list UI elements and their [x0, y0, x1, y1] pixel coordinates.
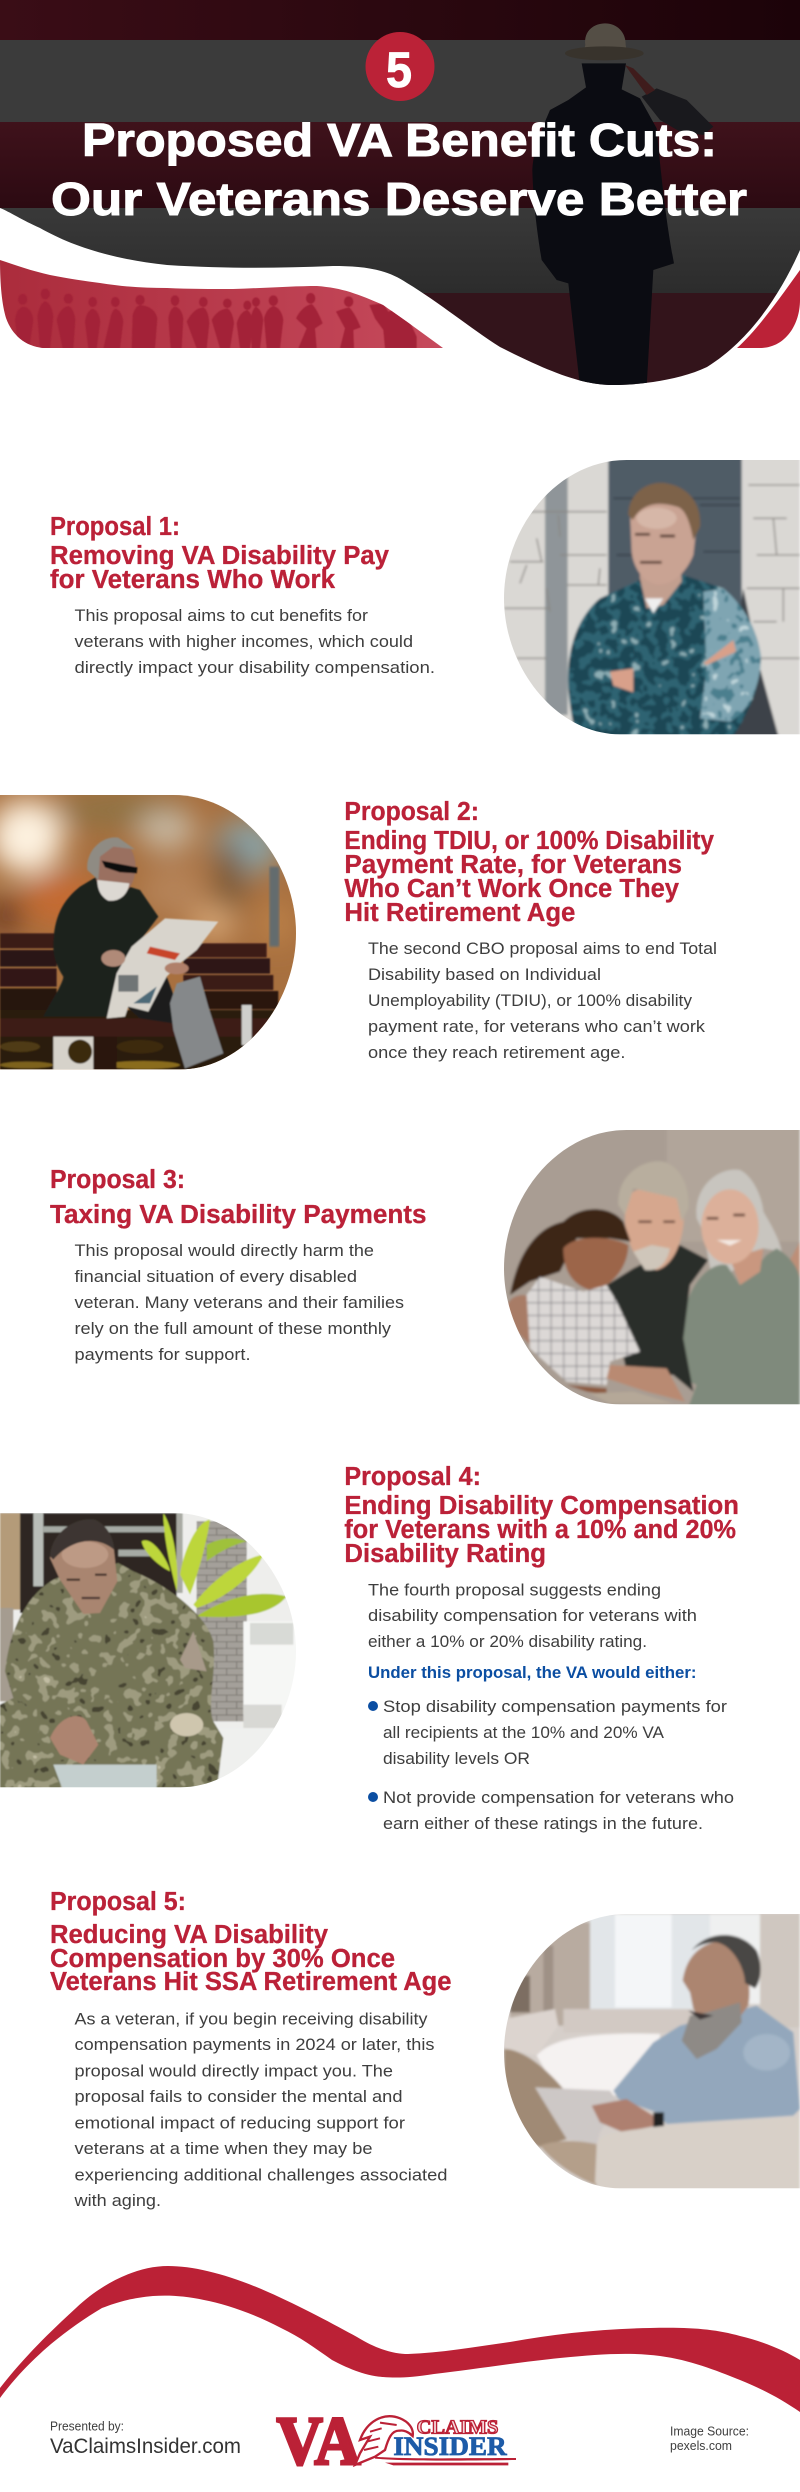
red corner accent [737, 270, 800, 348]
photo: bearded veteran writing on sofa [500, 1909, 800, 2196]
text: proposal 1 body: directly impact your disability compensation. [74, 659, 435, 677]
text: proposal 5 body: As a veteran, if you begin receiving disability [74, 2010, 428, 2028]
footer: presented by: Presented by: [50, 2418, 124, 2434]
text: proposal 2 body: once they reach retirement age. [368, 1044, 626, 1062]
heading: proposal 1: Proposal 1: [50, 513, 180, 541]
logo: VA Claims Insider [277, 2403, 516, 2479]
heading: proposal 3: Proposal 3: [50, 1166, 185, 1194]
photo: veteran in army camouflage [0, 1508, 300, 1795]
text: proposal 2 body: The second CBO proposal aims to end Total [368, 940, 717, 958]
photo: veteran family embrace [500, 1125, 800, 1412]
text: proposal 5 body: proposal fails to consider the mental and [74, 2088, 402, 2106]
heading: proposal 4: Proposal 4: [344, 1463, 481, 1491]
heading: proposal 5: Reducing VA Disability [50, 1921, 329, 1949]
text: proposal 5 body: emotional impact of reducing support for [74, 2114, 406, 2132]
text: proposal 1 body: This proposal aims to cut benefits for [74, 607, 369, 625]
logo: VA Claims Insider: VA [277, 2403, 361, 2479]
footer: image source [670, 2424, 749, 2453]
heading: proposal 5: Compensation by 30% Once [50, 1945, 395, 1973]
photo: veteran in navy uniform [500, 455, 800, 742]
footer: image source: pexels.com [670, 2438, 732, 2453]
text: proposal 2 body: Unemployability (TDIU), or 100% disability [368, 992, 693, 1010]
panel: proposal 1 [50, 455, 800, 742]
bullet: stop payments: all recipients at the 10% and 20% VA [383, 1724, 664, 1742]
heading: proposal 5 [50, 1888, 452, 1996]
heading: proposal 1: Removing VA Disability Pay [50, 542, 390, 570]
text: proposal 5 body: experiencing additional challenges associated [74, 2166, 448, 2184]
heading: proposal 2 [344, 798, 715, 927]
heading: proposal 3 [50, 1166, 426, 1229]
text: proposal 3 body: financial situation of every disabled [74, 1268, 357, 1286]
header banner [0, 0, 800, 388]
title [51, 114, 747, 225]
footer: presented by: VaClaimsInsider.com [50, 2435, 241, 2458]
text: proposal 2 body [368, 940, 717, 1062]
heading: proposal 2: Payment Rate, for Veterans [344, 851, 682, 879]
subheading: under this proposal: Under this proposal, the VA would either: [368, 1664, 696, 1682]
heading: proposal 5: Veterans Hit SSA Retirement Age [50, 1968, 452, 1996]
text: proposal 2 body: payment rate, for veterans who can’t work [368, 1018, 706, 1036]
text: proposal 5 body: with aging. [73, 2192, 161, 2210]
panel: proposal 3 [50, 1125, 800, 1412]
bullet: stop payments [368, 1698, 728, 1768]
footer wave [0, 2266, 800, 2412]
text: proposal 1 body [74, 607, 435, 677]
number badge: 5 [386, 42, 412, 98]
flag background with soldier silhouette [0, 0, 800, 388]
text: proposal 2 body: Disability based on Individual [368, 966, 601, 984]
heading: proposal 3: Taxing VA Disability Payments [50, 1201, 426, 1229]
text: proposal 4 body [368, 1582, 697, 1651]
bullet: stop payments: disability levels OR [383, 1750, 530, 1768]
panel: proposal 5 [50, 1888, 800, 2210]
text: proposal 5 body: proposal would directly impact you. The [74, 2062, 393, 2080]
icon: eagle head [355, 2416, 413, 2465]
heading: proposal 2: Hit Retirement Age [344, 899, 575, 927]
heading: proposal 4 [344, 1463, 739, 1568]
logo: VA Claims Insider: CLAIMS [417, 2416, 498, 2438]
heading: proposal 2: Who Can’t Work Once They [344, 875, 680, 903]
panel: proposal 4 [0, 1463, 739, 1833]
heading: proposal 5: Proposal 5: [50, 1888, 186, 1916]
red band with troop silhouettes [0, 260, 443, 348]
logo: VA Claims Insider: INSIDER [393, 2431, 507, 2461]
heading: proposal 1 [50, 513, 390, 594]
heading: proposal 2: Ending TDIU, or 100% Disability [344, 827, 715, 855]
footer: presented by [50, 2418, 241, 2458]
heading: proposal 2: Proposal 2: [344, 798, 479, 826]
text: proposal 4 body: The fourth proposal suggests ending [368, 1582, 661, 1600]
heading: proposal 4: Ending Disability Compensation [344, 1492, 739, 1520]
panel: proposal 2 [0, 790, 717, 1077]
footer: image source: Image Source: [670, 2424, 749, 2438]
text: proposal 5 body: compensation payments in 2024 or later, this [74, 2036, 434, 2054]
text: proposal 3 body: This proposal would directly harm the [74, 1242, 374, 1260]
text: proposal 3 body: payments for support. [74, 1346, 250, 1364]
text: proposal 5 body [73, 2010, 448, 2210]
text: proposal 3 body: veteran. Many veterans and their families [74, 1294, 404, 1312]
number badge [366, 32, 434, 101]
heading: proposal 1: for Veterans Who Work [50, 566, 336, 594]
text: proposal 4 body: either a 10% or 20% disability rating. [368, 1633, 647, 1651]
title: Our Veterans Deserve Better [51, 173, 747, 225]
text: proposal 4 body: disability compensation for veterans with [368, 1607, 697, 1625]
bullet: no future compensation: earn either of these ratings in the future. [383, 1815, 703, 1833]
heading: proposal 4: for Veterans with a 10% and 20% [344, 1516, 736, 1544]
text: proposal 1 body: veterans with higher incomes, which could [74, 633, 413, 651]
text: proposal 5 body: veterans at a time when they may be [74, 2140, 372, 2158]
text: proposal 3 body [74, 1242, 404, 1364]
bullet: no future compensation: Not provide compensation for veterans who [383, 1789, 734, 1807]
photo: veteran reading newspaper on bench [0, 790, 300, 1077]
bullet: stop payments: Stop disability compensation payments for [383, 1698, 728, 1716]
text: proposal 3 body: rely on the full amount of these monthly [74, 1320, 392, 1338]
heading: proposal 4: Disability Rating [344, 1540, 546, 1568]
title: Proposed VA Benefit Cuts: [82, 114, 717, 166]
bullet: no future compensation [368, 1789, 734, 1833]
